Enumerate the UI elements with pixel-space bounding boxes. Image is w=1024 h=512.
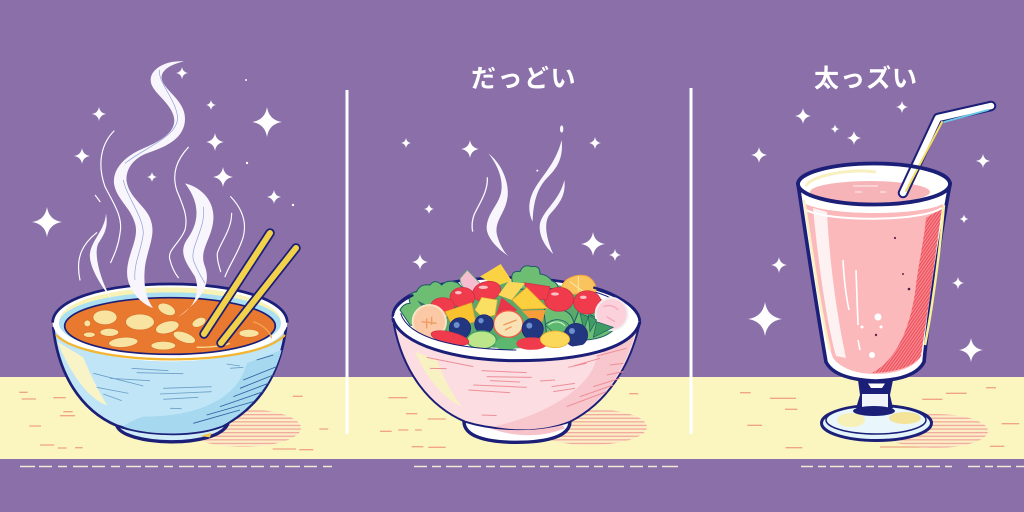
salad bowl drawing	[392, 264, 641, 442]
sparkles: smoothie	[748, 101, 990, 362]
heading: middle panel: だっどい	[471, 65, 577, 93]
bowl shadow	[185, 409, 301, 447]
glass rim and surface	[798, 164, 950, 204]
divider left	[346, 90, 348, 434]
salad food	[400, 264, 628, 350]
glass rim outline	[798, 164, 950, 204]
divider right	[690, 88, 692, 434]
sparkles: soup	[32, 67, 294, 237]
sparkles: salad	[401, 137, 621, 270]
glass body	[798, 184, 950, 381]
glass highlights	[804, 200, 944, 358]
straw	[903, 106, 991, 193]
glass shadow	[882, 414, 988, 448]
table surface	[0, 377, 1024, 459]
smoothie liquid	[806, 204, 943, 374]
soup bowl drawing	[53, 284, 287, 442]
panel: smoothie glass	[798, 106, 991, 448]
heading: right panel: 太っズい	[814, 64, 918, 93]
panel: soup bowl	[53, 233, 301, 447]
bowl shadow	[533, 409, 647, 445]
glass base	[822, 380, 932, 440]
steam: salad	[472, 125, 565, 256]
chopsticks	[204, 233, 296, 343]
steam: soup	[79, 61, 245, 317]
liquid shade	[872, 208, 942, 373]
panel: salad bowl	[392, 264, 647, 445]
dashed lines below table	[20, 466, 1024, 468]
